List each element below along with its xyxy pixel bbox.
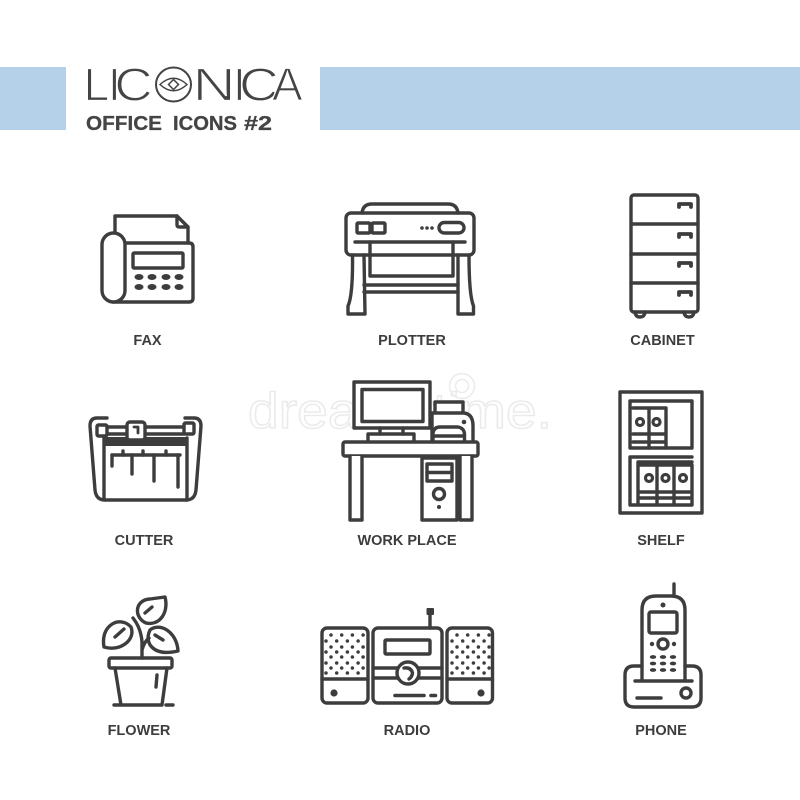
label: plotter: PLOTTER bbox=[378, 333, 446, 349]
center unit bbox=[373, 608, 442, 703]
label: flower: FLOWER bbox=[108, 723, 171, 739]
logo wordmark: C bbox=[239, 59, 279, 110]
icon: shelf bbox=[620, 392, 702, 513]
logo wordmark: A bbox=[272, 58, 303, 110]
subtitle bbox=[86, 112, 272, 135]
watermark: dreamstime. bbox=[248, 383, 552, 439]
left speaker bbox=[322, 628, 368, 703]
icon: flower bbox=[103, 597, 178, 705]
subtitle: OFFICE bbox=[86, 112, 162, 135]
icon: cutter bbox=[90, 418, 201, 500]
header band: left bbox=[0, 67, 66, 130]
label: cabinet: CABINET bbox=[630, 333, 695, 349]
icon: cabinet bbox=[631, 195, 698, 317]
icon: work place bbox=[343, 382, 478, 520]
logo wordmark bbox=[84, 58, 303, 111]
icon: fax bbox=[102, 216, 193, 302]
label: radio: RADIO bbox=[384, 723, 430, 739]
label: phone: PHONE bbox=[635, 723, 687, 739]
label: fax: FAX bbox=[133, 333, 162, 349]
logo wordmark: C bbox=[114, 59, 153, 111]
logo wordmark: N bbox=[192, 60, 236, 111]
subtitle: #2 bbox=[244, 112, 272, 135]
subtitle: ICONS bbox=[173, 112, 237, 135]
label: cutter: CUTTER bbox=[115, 533, 174, 549]
logo wordmark: I bbox=[233, 58, 246, 110]
icon: radio bbox=[322, 608, 492, 703]
label: work place: WORK PLACE bbox=[357, 533, 457, 549]
icon: plotter bbox=[346, 204, 474, 314]
right speaker bbox=[447, 628, 492, 703]
logo wordmark: I bbox=[108, 58, 121, 110]
icon: phone bbox=[625, 584, 701, 707]
header band: right bbox=[320, 67, 800, 130]
logo wordmark: L bbox=[84, 58, 109, 110]
logo wordmark: O bbox=[153, 58, 189, 110]
label: shelf: SHELF bbox=[637, 533, 685, 549]
